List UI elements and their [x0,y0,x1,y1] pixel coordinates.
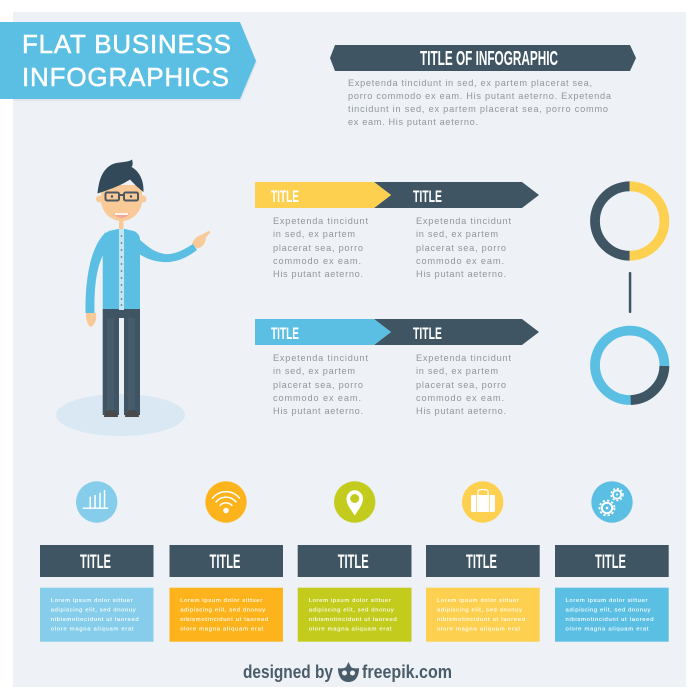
section: blue arrow row [255,319,539,416]
text column left: placerat sea, porro [273,243,363,253]
card text: olore magna aliquam erat [309,626,392,632]
card text: nibismotincidunt ut laoreed [566,617,654,623]
card 5: settings [555,481,669,642]
card text: adipiscing elit, sed dnonuy [180,608,265,614]
title banner [0,22,257,101]
text column left [273,353,368,416]
card text [426,588,540,642]
card 2: wifi [170,481,283,642]
arrow titles: TITLE [413,187,442,206]
text column right: placerat sea, porro [416,380,506,390]
card title: TITLE [210,552,240,573]
card title [298,545,412,577]
intro text: porro commodo ex eam. His putant aeterno. Expetenda [348,91,612,101]
footer credit: freepik.com [362,662,452,682]
donut chart: yellow and dark 50/50 [595,186,664,256]
intro text: Expetenda tincidunt in sed, ex partem placerat sea, [348,78,592,88]
text column left: commodo ex eam. [273,393,361,403]
donut chart: blue with dark quarter [595,331,664,400]
card title: TITLE [338,552,369,573]
card title [170,545,283,577]
neck [119,219,124,229]
card text: Lorem ipsum dolor sittuer [309,598,391,604]
card text: nibismotincidunt ut laoreed [309,617,397,623]
text column right: Expetenda tincidunt [416,216,511,226]
card text: Lorem ipsum dolor sittuer [51,598,133,604]
intro text: ex eam. His putant aeterno. [348,117,478,127]
card text: olore magna aliquam erat [180,626,264,632]
right arm and hand [130,230,210,262]
section: yellow arrow row [255,182,539,279]
icon: wifi [205,481,247,523]
text column right: His putant aeterno. [416,406,506,416]
text column left: His putant aeterno. [273,269,363,279]
glasses [106,192,138,200]
card 4: briefcase [426,481,540,642]
title ribbon: TITLE OF INFOGRAPHIC [420,48,558,70]
text column left: commodo ex eam. [273,256,361,266]
intro text: tincidunt in sed, ex partem placerat sea, porro commo [348,104,608,114]
head [96,160,146,221]
arrow: dark ribbon [374,319,539,345]
text column right: placerat sea, porro [416,243,506,253]
text column right [416,353,511,416]
card text: nibismotincidunt ut laoreed [180,617,268,623]
footer credit: designed by [243,662,333,682]
icon: gears [591,481,633,523]
card text: olore magna aliquam erat [51,626,134,632]
arrow titles [271,324,442,343]
card title: TITLE [80,552,111,573]
arrow titles: TITLE [271,324,299,343]
arrow: yellow ribbon [255,182,391,208]
text column right: in sed, ex partem [416,366,498,376]
card text [298,588,412,642]
card title: TITLE [466,552,497,573]
text column left: His putant aeterno. [273,406,363,416]
card text: nibismotincidunt ut laoreed [437,617,525,623]
card text: Lorem ipsum dolor sittuer [566,598,648,604]
left arm and hand [85,232,106,327]
text column left: Expetenda tincidunt [273,216,368,226]
title banner: INFOGRAPHICS [22,62,229,92]
card title: TITLE [595,552,626,573]
icon: map pin [334,481,375,523]
mouth [114,213,129,218]
icon: freepik mascot [338,662,359,682]
text column right: His putant aeterno. [416,269,506,279]
icon: bar chart [76,481,117,523]
text column right: commodo ex eam. [416,256,504,266]
card text [40,588,154,642]
card text: nibismotincidunt ut laoreed [51,617,139,623]
icon: briefcase [462,481,503,523]
hair [98,160,144,194]
infographic title and intro [330,45,636,127]
card text: Lorem ipsum dolor sittuer [180,598,262,604]
intro text [348,78,612,127]
card 3: location [298,481,412,642]
title ribbon [330,45,636,71]
text column left [273,216,368,279]
text column left: placerat sea, porro [273,380,363,390]
card text: adipiscing elit, sed dnonuy [51,608,136,614]
card text [170,588,283,642]
arrow titles: TITLE [271,187,299,206]
ground shadow [56,394,185,436]
connector line [629,272,631,313]
card text: adipiscing elit, sed dnonuy [566,608,651,614]
text column left: Expetenda tincidunt [273,353,368,363]
text column right: Expetenda tincidunt [416,353,511,363]
text column right: in sed, ex partem [416,229,498,239]
arrow titles: TITLE [413,324,442,343]
card text: adipiscing elit, sed dnonuy [309,608,394,614]
text column left: in sed, ex partem [273,229,355,239]
card title [555,545,669,577]
arrow titles [271,187,442,206]
shoes [104,410,139,417]
card text: olore magna aliquam erat [566,626,649,632]
shirt [103,229,140,310]
title banner: FLAT BUSINESS [22,29,231,59]
text column right [416,216,511,279]
card 1: chart [40,481,154,642]
text column right: commodo ex eam. [416,393,504,403]
card text [555,588,669,642]
card title [40,545,154,577]
text column left: in sed, ex partem [273,366,355,376]
card title [426,545,540,577]
card text: adipiscing elit, sed dnonuy [437,608,522,614]
character: man pointing [56,160,210,436]
card text: Lorem ipsum dolor sittuer [437,598,519,604]
footer credit [243,662,452,682]
arrow: dark ribbon [374,182,539,208]
arrow: blue ribbon [255,319,391,345]
card text: olore magna aliquam erat [437,626,520,632]
trousers [103,309,140,415]
